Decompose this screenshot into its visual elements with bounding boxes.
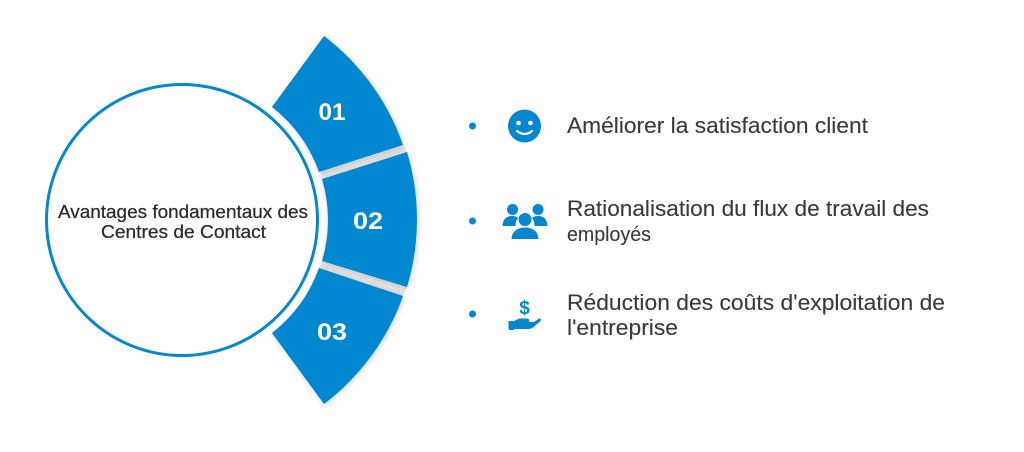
segment 03 [272,268,403,404]
gap strip upper [320,145,407,179]
icon: smiley [508,110,541,142]
segment 01 [272,36,403,172]
segment 02: 02 [353,208,383,235]
item 1 text: Améliorer la satisfaction client [567,113,868,138]
item 3 text: l'entreprise [567,315,678,340]
segment 01: 01 [318,99,346,126]
item 3 text: Réduction des coûts d'exploitation de [567,290,945,315]
item 2 [469,196,935,246]
item 2 text: Rationalisation du flux de travail des [567,196,929,221]
icon: hand with dollar: $ [519,298,530,319]
circle title: Centres de Contact [101,222,266,242]
gap strip lower [319,261,407,296]
icon: people [502,204,548,239]
icon: hand with dollar [508,298,541,330]
segment 03: 03 [317,319,347,346]
segment 02 [322,152,417,287]
panel: numbered arc segments [272,36,417,404]
item 2 text: employés [567,223,651,246]
item 1 [469,110,868,142]
item 3 [469,290,951,340]
central circle [46,84,318,356]
circle title: Avantages fondamentaux des [58,202,308,222]
